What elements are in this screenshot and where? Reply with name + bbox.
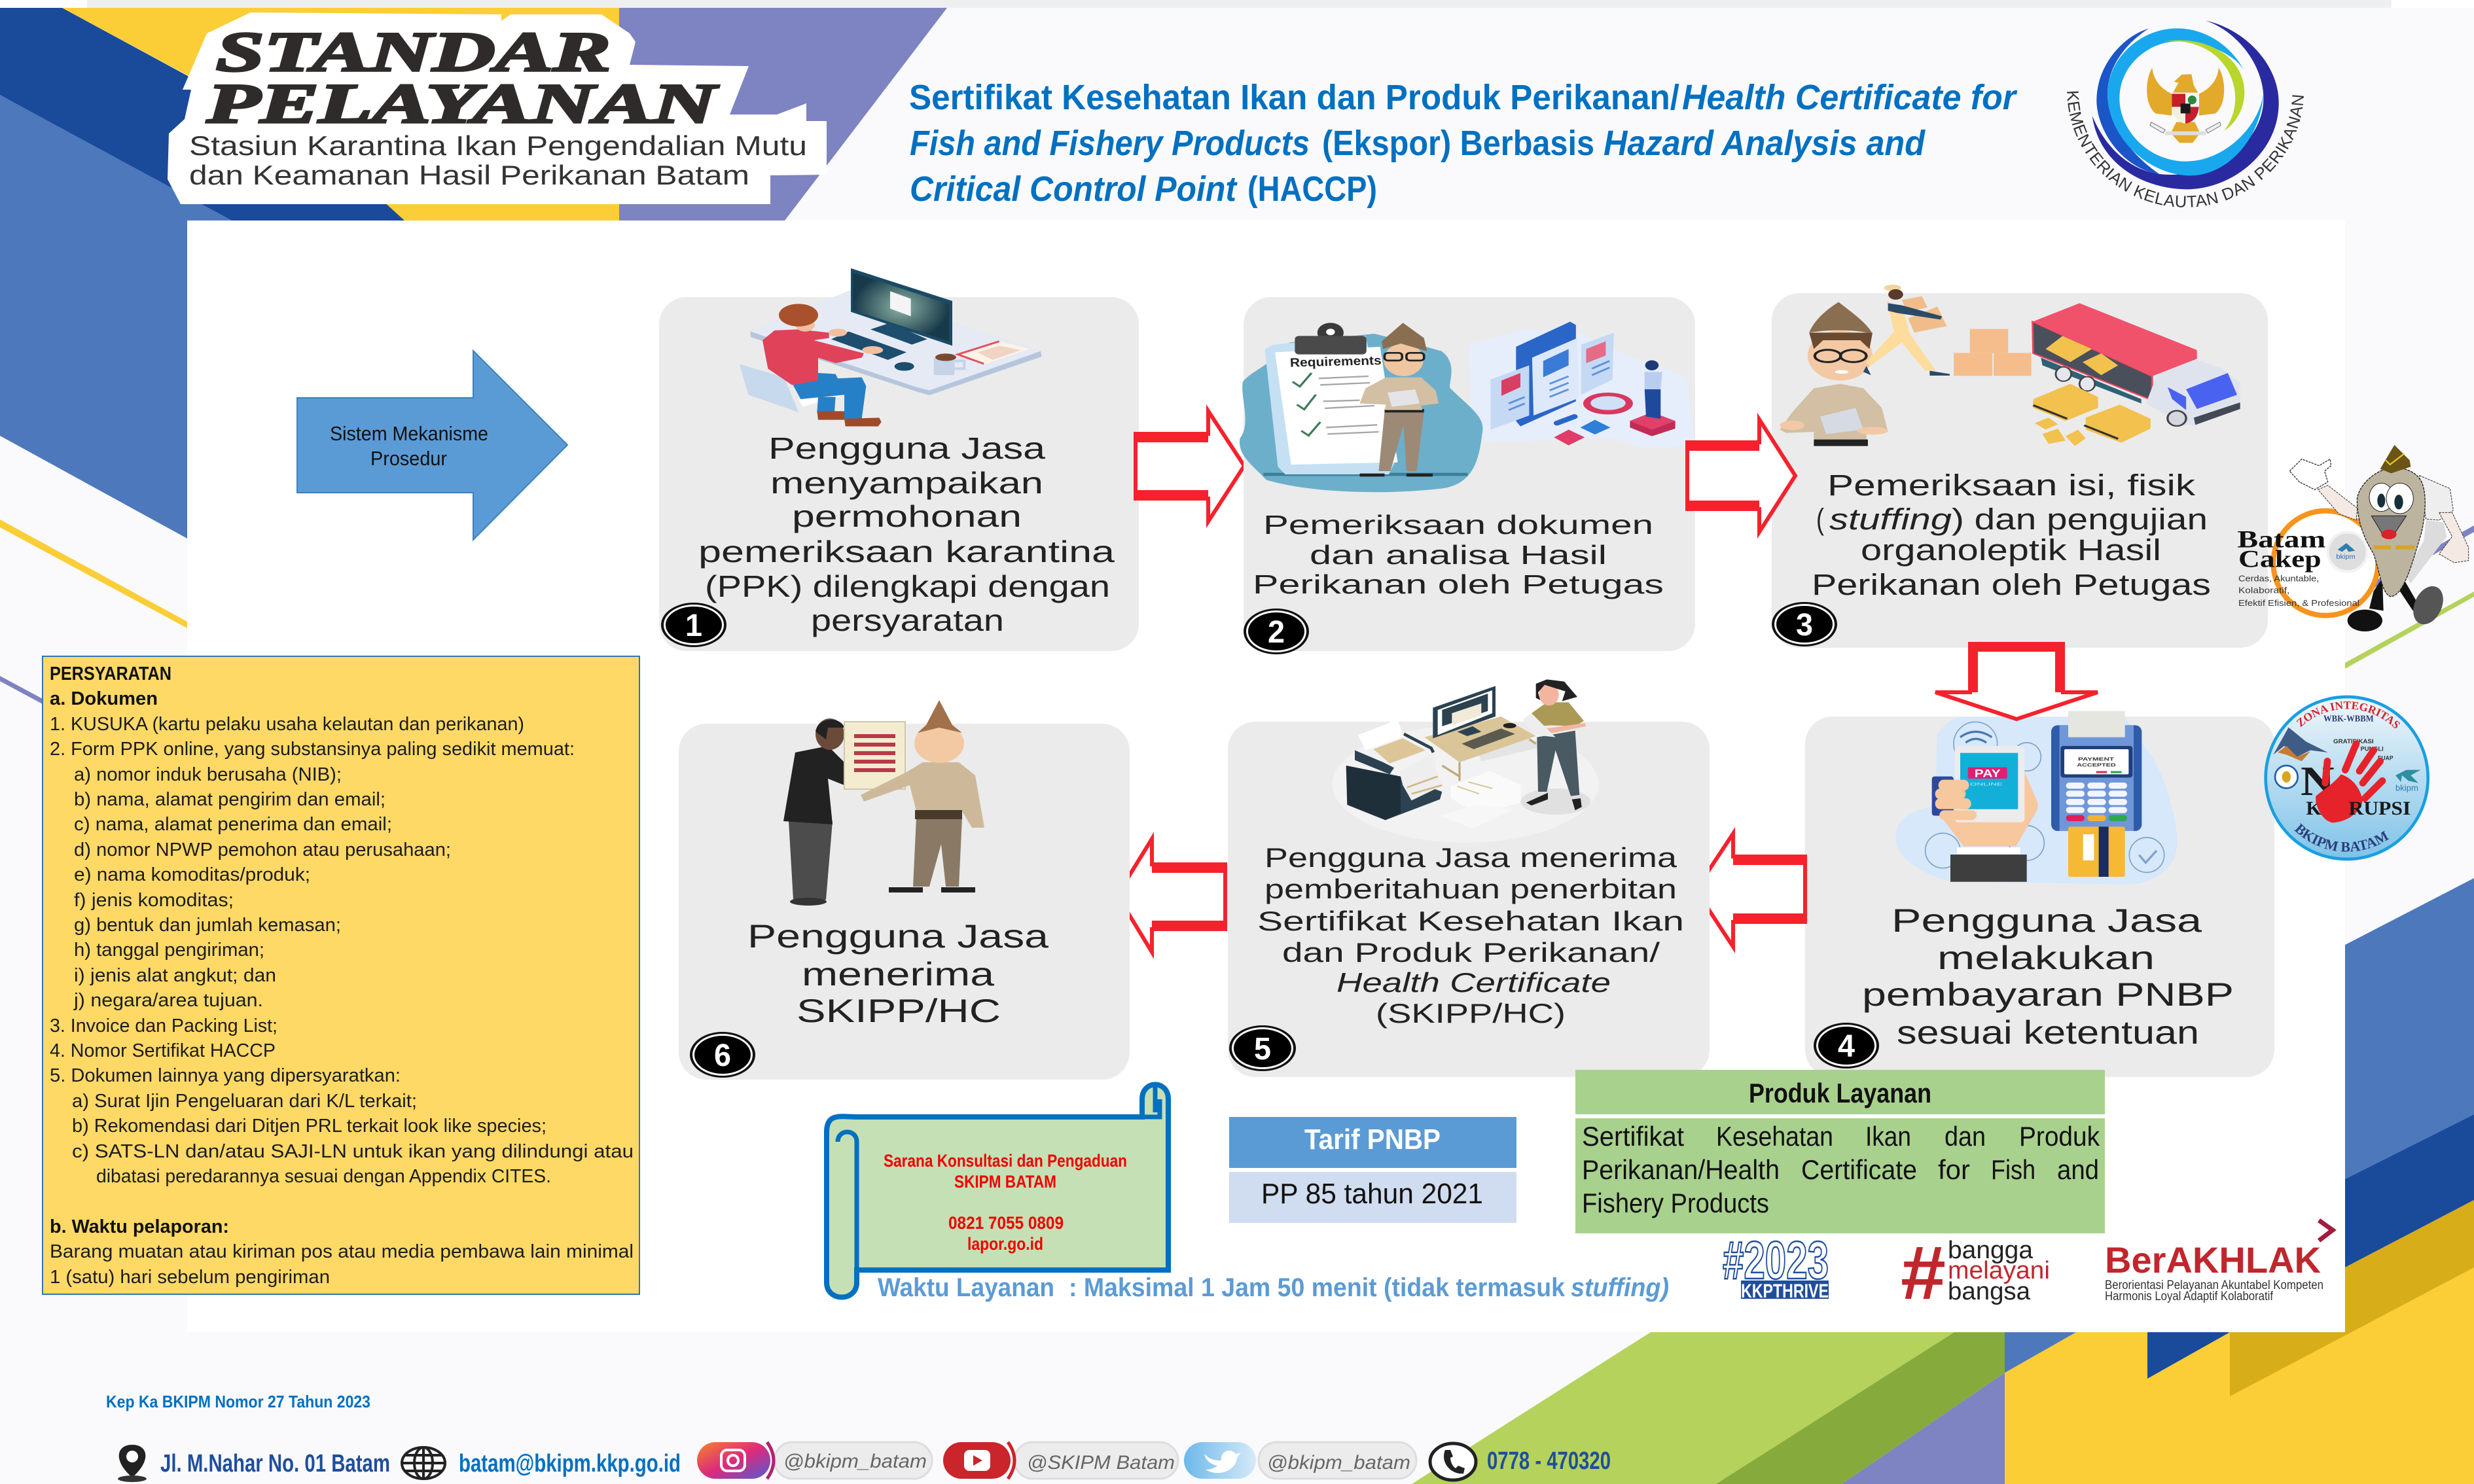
icon: ministry logo: KEMENTERIAN KELAUTAN DAN PERIKANAN <box>2067 92 2304 207</box>
badge: zona integritas no korupsi: WBK-WBBM <box>2323 713 2374 723</box>
panel: persyaratan requirements: 1. KUSUKA (kartu pelaku usaha kelautan dan perikanan) <box>50 714 524 735</box>
text: step 6 <box>747 918 1049 1029</box>
arrow: Sistem Mekanisme Prosedur <box>297 351 567 540</box>
logo: BerAKHLAK: Harmonis Loyal Adaptif Kolaboratif <box>2105 1290 2274 1303</box>
panel: step 6 <box>679 700 1130 1080</box>
text: step 4 <box>1862 902 2234 1051</box>
social: youtube <box>943 1442 1178 1479</box>
table: produk layanan: Produk <box>2019 1121 2100 1152</box>
panel: persyaratan requirements: f) jenis komoditas; <box>74 890 234 911</box>
text: step 4: sesuai ketentuan <box>1897 1014 2199 1051</box>
arrow: step 2 to 3 <box>1687 419 1795 532</box>
text: service time <box>878 1273 1669 1302</box>
arrow: step 3 to 4 <box>1935 644 2098 719</box>
text: step 6: Pengguna Jasa <box>747 918 1049 955</box>
illustration: officer, courier and truck <box>1780 285 2240 446</box>
table: tarif PNBP: Tarif PNBP <box>1304 1123 1441 1156</box>
badge: zona integritas no korupsi: K <box>2306 798 2322 819</box>
text: step 1: pemeriksaan karantina <box>698 535 1115 569</box>
heading: service title: (Ekspor) Berbasis <box>1322 124 1594 163</box>
text: step 2: Pemeriksaan dokumen <box>1263 510 1653 540</box>
mascot: Batam Cakep: Cakep <box>2238 546 2322 573</box>
mascot: Batam Cakep: Batam <box>2237 527 2325 554</box>
panel: persyaratan requirements: e) nama komoditas/produk; <box>74 864 310 885</box>
callout: consultation scroll: lapor.go.id <box>967 1234 1043 1254</box>
text: step 5: Sertifikat Kesehatan Ikan <box>1257 906 1684 936</box>
badge: zona integritas no korupsi <box>2264 695 2429 861</box>
text: step 4: pembayaran PNBP <box>1862 976 2234 1013</box>
text: step 1: (PPK) dilengkapi dengan <box>705 569 1110 603</box>
panel: persyaratan requirements: b. Waktu pelaporan: <box>50 1216 229 1237</box>
footer: contact bar <box>118 1442 1611 1482</box>
icon: globe <box>402 1447 445 1479</box>
panel: persyaratan requirements: dibatasi peredarannya sesuai dengan Appendix CITES. <box>96 1166 551 1187</box>
text: step 6: SKIPP/HC <box>797 993 1001 1029</box>
callout: consultation scroll <box>827 1083 1168 1297</box>
arrow: step 4 to 5 <box>1696 834 1805 947</box>
illustration: payment terminal <box>1896 711 2178 885</box>
text: service time: stuffing) <box>1571 1273 1669 1302</box>
arrow: step 5 to 6 <box>1117 839 1225 952</box>
mascot: Batam Cakep <box>2237 445 2469 631</box>
table: produk layanan: Produk Layanan <box>1749 1078 1931 1108</box>
panel: persyaratan requirements: c) nama, alamat penerima dan email; <box>74 814 392 835</box>
text: step 5: Pengguna Jasa menerima <box>1264 842 1677 873</box>
text: step 6: menerima <box>802 956 994 993</box>
panel: persyaratan requirements: 5. Dokumen lainnya yang dipersyaratkan: <box>50 1065 401 1086</box>
logo: #2023 KKP Thrive: #2023 <box>1723 1231 1829 1290</box>
illustration: payment terminal: ONLINE <box>1970 783 2003 787</box>
text: address: Jl. M.Nahar No. 01 Batam <box>160 1450 390 1477</box>
logo: BerAKHLAK: Berorientasi Pelayanan Akuntabel Kompeten <box>2105 1279 2323 1292</box>
badge: number 4: 4 <box>1838 1029 1855 1064</box>
text: step 4: melakukan <box>1937 940 2155 976</box>
table: produk layanan: Fishery Products <box>1582 1188 1769 1218</box>
icon: phone <box>1430 1443 1476 1480</box>
text: service time: Waktu Layanan <box>878 1273 1054 1302</box>
heading: service title: Hazard Analysis and <box>1604 124 1926 163</box>
panel: step 3 <box>1772 285 2268 648</box>
illustration: certificate handover <box>783 700 984 906</box>
logo: bangga melayani bangsa: bangsa <box>1948 1278 2031 1305</box>
logo: BerAKHLAK: BerAKHLAK <box>2105 1239 2321 1281</box>
illustration: woman at desk with printer <box>1333 679 1598 843</box>
illustration: document check <box>1240 322 1695 492</box>
heading: service title <box>909 78 2018 209</box>
panel: step 1 <box>659 268 1139 651</box>
badge: zona integritas no korupsi: SUAP <box>2378 755 2393 762</box>
illustration: document check: Requirements <box>1289 353 1382 370</box>
panel: persyaratan requirements: 4. Nomor Sertifikat HACCP <box>50 1040 276 1061</box>
heading: service title: Sertifikat Kesehatan Ikan dan Produk Perikanan/ <box>909 78 1679 117</box>
text: step 3: Perikanan oleh Petugas <box>1812 568 2211 601</box>
mascot: Batam Cakep: Cerdas, Akuntable, <box>2238 573 2319 583</box>
text: service time: : Maksimal 1 Jam 50 menit (tidak termasuk <box>1069 1273 1566 1302</box>
badge: number 4 <box>1814 1023 1879 1069</box>
badge: number 5: 5 <box>1254 1032 1271 1067</box>
text: step 3: organoleptik Hasil <box>1861 533 2161 567</box>
mascot: Batam Cakep: Efektif Efisien, & Profesional <box>2238 598 2359 608</box>
panel: persyaratan requirements: i) jenis alat angkut; dan <box>74 965 276 986</box>
heading: service title: Fish and Fishery Products <box>910 124 1310 163</box>
table: tarif PNBP <box>1229 1117 1516 1223</box>
title sticker: Standar Pelayanan: Stasiun Karantina Ikan Pengendalian Mutu <box>189 130 807 161</box>
arrow: step 1 to 2 <box>1136 411 1244 521</box>
text: decree reference: Kep Ka BKIPM Nomor 27 Tahun 2023 <box>106 1392 370 1411</box>
badge: number 2: 2 <box>1268 615 1285 650</box>
logo: bangga melayani bangsa <box>1901 1230 2050 1315</box>
badge: number 3: 3 <box>1796 608 1813 643</box>
title sticker: Standar Pelayanan: STANDAR <box>216 20 611 83</box>
text: step 2: dan analisa Hasil <box>1310 540 1607 570</box>
heading: service title: (HACCP) <box>1247 169 1377 209</box>
badge: zona integritas no korupsi: RUPSI <box>2348 798 2411 819</box>
social: twitter <box>1184 1442 1416 1479</box>
panel: persyaratan requirements: 1 (satu) hari sebelum pengiriman <box>50 1267 330 1288</box>
badge: number 1 <box>661 603 726 647</box>
logo: #2023 KKP Thrive <box>1723 1231 1829 1302</box>
badge: number 6 <box>690 1032 755 1078</box>
table: produk layanan: Fish <box>1991 1154 2035 1185</box>
text: step 5 <box>1257 842 1684 1029</box>
table: produk layanan: for <box>1938 1154 1970 1185</box>
badge: number 3 <box>1772 602 1837 646</box>
panel: persyaratan requirements: b) Rekomendasi dari Ditjen PRL terkait look like species; <box>72 1116 547 1137</box>
panel: persyaratan requirements: b) nama, alamat pengirim dan email; <box>74 789 385 810</box>
mascot: Batam Cakep: bkipm <box>2336 554 2356 561</box>
badge: zona integritas no korupsi: PUNGLI <box>2361 745 2384 752</box>
icon: ministry logo <box>2067 21 2304 207</box>
title sticker: Standar Pelayanan: dan Keamanan Hasil Perikanan Batam <box>189 160 749 190</box>
badge: zona integritas no korupsi: bkipm <box>2395 783 2418 792</box>
panel: persyaratan requirements: j) negara/area tujuan. <box>73 990 263 1011</box>
badge: zona integritas no korupsi: BKIPM BATAM <box>2294 823 2389 852</box>
text: step 1: Pengguna Jasa <box>768 431 1046 465</box>
table: produk layanan <box>1575 1070 2105 1233</box>
text: step 5: pemberitahuan penerbitan <box>1264 874 1677 904</box>
callout: consultation scroll: Sarana Konsultasi dan Pengaduan <box>884 1151 1127 1171</box>
panel: persyaratan requirements: g) bentuk dan jumlah kemasan; <box>74 915 341 936</box>
logo: #2023 KKP Thrive: KKPTHRIVE <box>1741 1281 1829 1302</box>
badge: number 2 <box>1244 609 1309 654</box>
table: produk layanan: and <box>2057 1154 2099 1185</box>
badge: number 6: 6 <box>714 1038 731 1073</box>
table: tarif PNBP: PP 85 tahun 2021 <box>1261 1178 1483 1210</box>
text: step 2: Perikanan oleh Petugas <box>1253 569 1664 599</box>
title sticker: Standar Pelayanan: PELAYANAN <box>206 72 719 135</box>
text: phone number: 0778 - 470320 <box>1487 1447 1611 1475</box>
illustration: payment terminal: PAY <box>1975 767 2001 779</box>
text: step 5: (SKIPP/HC) <box>1376 998 1566 1029</box>
illustration: payment terminal: ACCEPTED <box>2077 762 2116 768</box>
logo: BerAKHLAK <box>2105 1220 2333 1303</box>
mascot: Batam Cakep: Kolaboratif, <box>2238 586 2289 595</box>
badge: zona integritas no korupsi: ZONA INTEGRITAS <box>2296 701 2400 728</box>
panel: persyaratan requirements: Barang muatan atau kiriman pos atau media pembawa lain minimal <box>50 1241 634 1262</box>
panel: persyaratan requirements: 3. Invoice dan Packing List; <box>50 1016 278 1036</box>
social: instagram: @bkipm_batam <box>783 1451 927 1472</box>
badge: number 5 <box>1229 1025 1296 1071</box>
callout: consultation scroll: 0821 7055 0809 <box>948 1213 1064 1233</box>
panel: step 2 <box>1240 297 1695 654</box>
text: step 3: ( <box>1816 503 1824 536</box>
table: produk layanan: Certificate <box>1801 1154 1917 1185</box>
illustration: payment terminal: PAYMENT <box>2078 756 2115 762</box>
table: produk layanan: Ikan <box>1865 1121 1911 1152</box>
table: produk layanan: Perikanan/Health <box>1582 1154 1780 1185</box>
panel: persyaratan requirements: a) nomor induk berusaha (NIB); <box>74 764 342 785</box>
text: step 2 <box>1253 510 1664 599</box>
panel: persyaratan requirements <box>43 656 639 1294</box>
panel: persyaratan requirements: c) SATS-LN dan/atau SAJI-LN untuk ikan yang dilindungi atau <box>72 1141 634 1162</box>
badge: number 1: 1 <box>685 609 702 643</box>
panel: step 5 <box>1228 679 1710 1077</box>
badge: zona integritas no korupsi: N <box>2301 758 2335 804</box>
table: produk layanan: Sertifikat <box>1582 1121 1684 1152</box>
arrow: Sistem Mekanisme Prosedur: Sistem Mekanisme <box>330 422 488 445</box>
arrow: Sistem Mekanisme Prosedur: Prosedur <box>370 447 447 470</box>
panel: step 4 <box>1805 711 2274 1077</box>
panel: persyaratan requirements: PERSYARATAN <box>50 663 171 684</box>
text: email: batam@bkipm.kkp.go.id <box>459 1450 681 1477</box>
panel: persyaratan requirements: d) nomor NPWP pemohon atau perusahaan; <box>74 839 451 860</box>
panel: persyaratan requirements: a. Dokumen <box>50 688 158 709</box>
icon: location pin <box>118 1445 147 1482</box>
table: produk layanan: dan <box>1945 1121 1986 1152</box>
text: step 4: Pengguna Jasa <box>1891 902 2202 939</box>
logo: bangga melayani bangsa: # <box>1901 1230 1946 1315</box>
heading: service title: Critical Control Point <box>910 169 1238 209</box>
social: youtube: @SKIPM Batam <box>1027 1452 1175 1474</box>
text: step 3 <box>1812 468 2211 601</box>
text: step 3: ) dan pengujian <box>1952 503 2208 536</box>
text: step 1: persyaratan <box>811 603 1004 637</box>
text: step 1 <box>698 431 1115 637</box>
social: instagram <box>697 1442 932 1479</box>
text: step 1: menyampaikan <box>770 466 1043 500</box>
text: step 1: permohonan <box>792 499 1022 533</box>
logo: bangga melayani bangsa: bangga <box>1948 1237 2034 1264</box>
title sticker: Standar Pelayanan <box>168 12 827 204</box>
panel: persyaratan requirements: 2. Form PPK online, yang substansinya paling sedikit memuat: <box>50 739 575 760</box>
social: twitter: @bkipm_batam <box>1267 1452 1410 1474</box>
logo: bangga melayani bangsa: melayani <box>1948 1257 2050 1284</box>
badge: zona integritas no korupsi: GRATIFIKASI <box>2333 738 2374 745</box>
callout: consultation scroll: SKIPM BATAM <box>954 1172 1056 1192</box>
text: step 5: Health Certificate <box>1336 967 1611 998</box>
panel: persyaratan requirements: h) tanggal pengiriman; <box>74 940 264 961</box>
text: step 3: Pemeriksaan isi, fisik <box>1827 468 2196 502</box>
illustration: user at computer <box>740 268 1042 427</box>
text: step 5: dan Produk Perikanan/ <box>1282 937 1660 968</box>
table: produk layanan: Kesehatan <box>1716 1121 1833 1152</box>
text: step 3: stuffing <box>1829 503 1952 536</box>
panel: persyaratan requirements: a) Surat Ijin Pengeluaran dari K/L terkait; <box>72 1091 417 1112</box>
heading: service title: Health Certificate for <box>1682 78 2018 117</box>
